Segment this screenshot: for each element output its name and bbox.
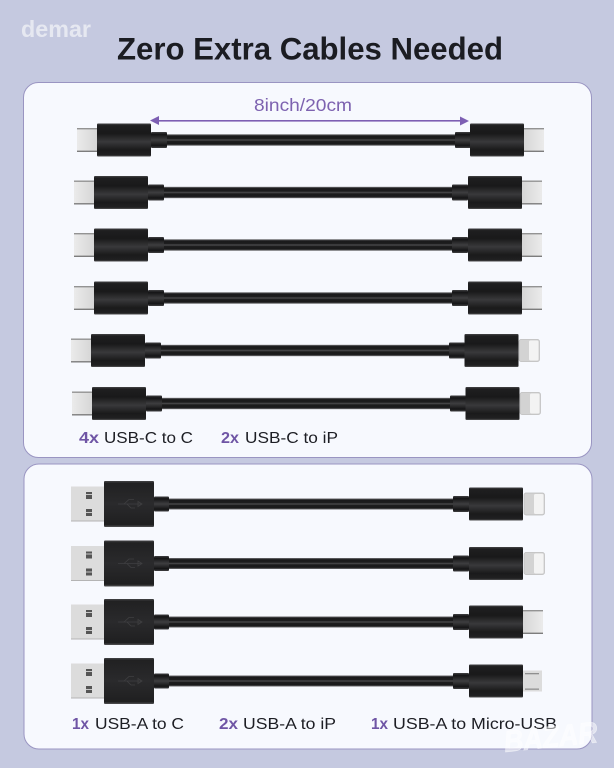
label: 4x USB-C to C: USB-C to C [104,430,193,447]
panel: USB-A cables [24,464,592,749]
watermark: Bazar: BAZAR [502,716,600,759]
label: 2x USB-C to iP: 2x [221,430,239,447]
cable: USB-A to iP 2 [71,540,544,586]
watermark: demar: demar [21,16,91,42]
cable: USB-C to C 3 [74,228,542,262]
title: Zero Extra Cables Needed [117,30,503,66]
cable: USB-C to C 2 [74,176,542,209]
cable: USB-A to iP 1 [71,481,544,527]
label: 4x USB-C to C: 4x [79,430,99,447]
label: 1x USB-A to Micro-USB: USB-A to Micro-USB [393,716,557,733]
cable: USB-C to C 1 [77,124,544,156]
label: 2x USB-A to iP: USB-A to iP [243,716,336,733]
cable: USB-A to Micro-USB [71,658,542,704]
arrow: cable length [150,116,469,126]
cable: USB-A to C [71,599,543,645]
cable: USB-C to C 4 [74,282,542,314]
label: 2x USB-C to iP: USB-C to iP [245,430,338,447]
label: 1x USB-A to C: USB-A to C [95,716,184,733]
label: 1x USB-A to C: 1x [72,716,89,733]
panel: USB-C cables [24,82,592,458]
label: 2x USB-A to iP: 2x [219,716,238,733]
label: 1x USB-A to Micro-USB: 1x [371,716,388,733]
cable: USB-C to iP 2 [72,387,540,420]
length label: 8inch/20cm [254,95,352,115]
cable: USB-C to iP 1 [71,334,540,367]
